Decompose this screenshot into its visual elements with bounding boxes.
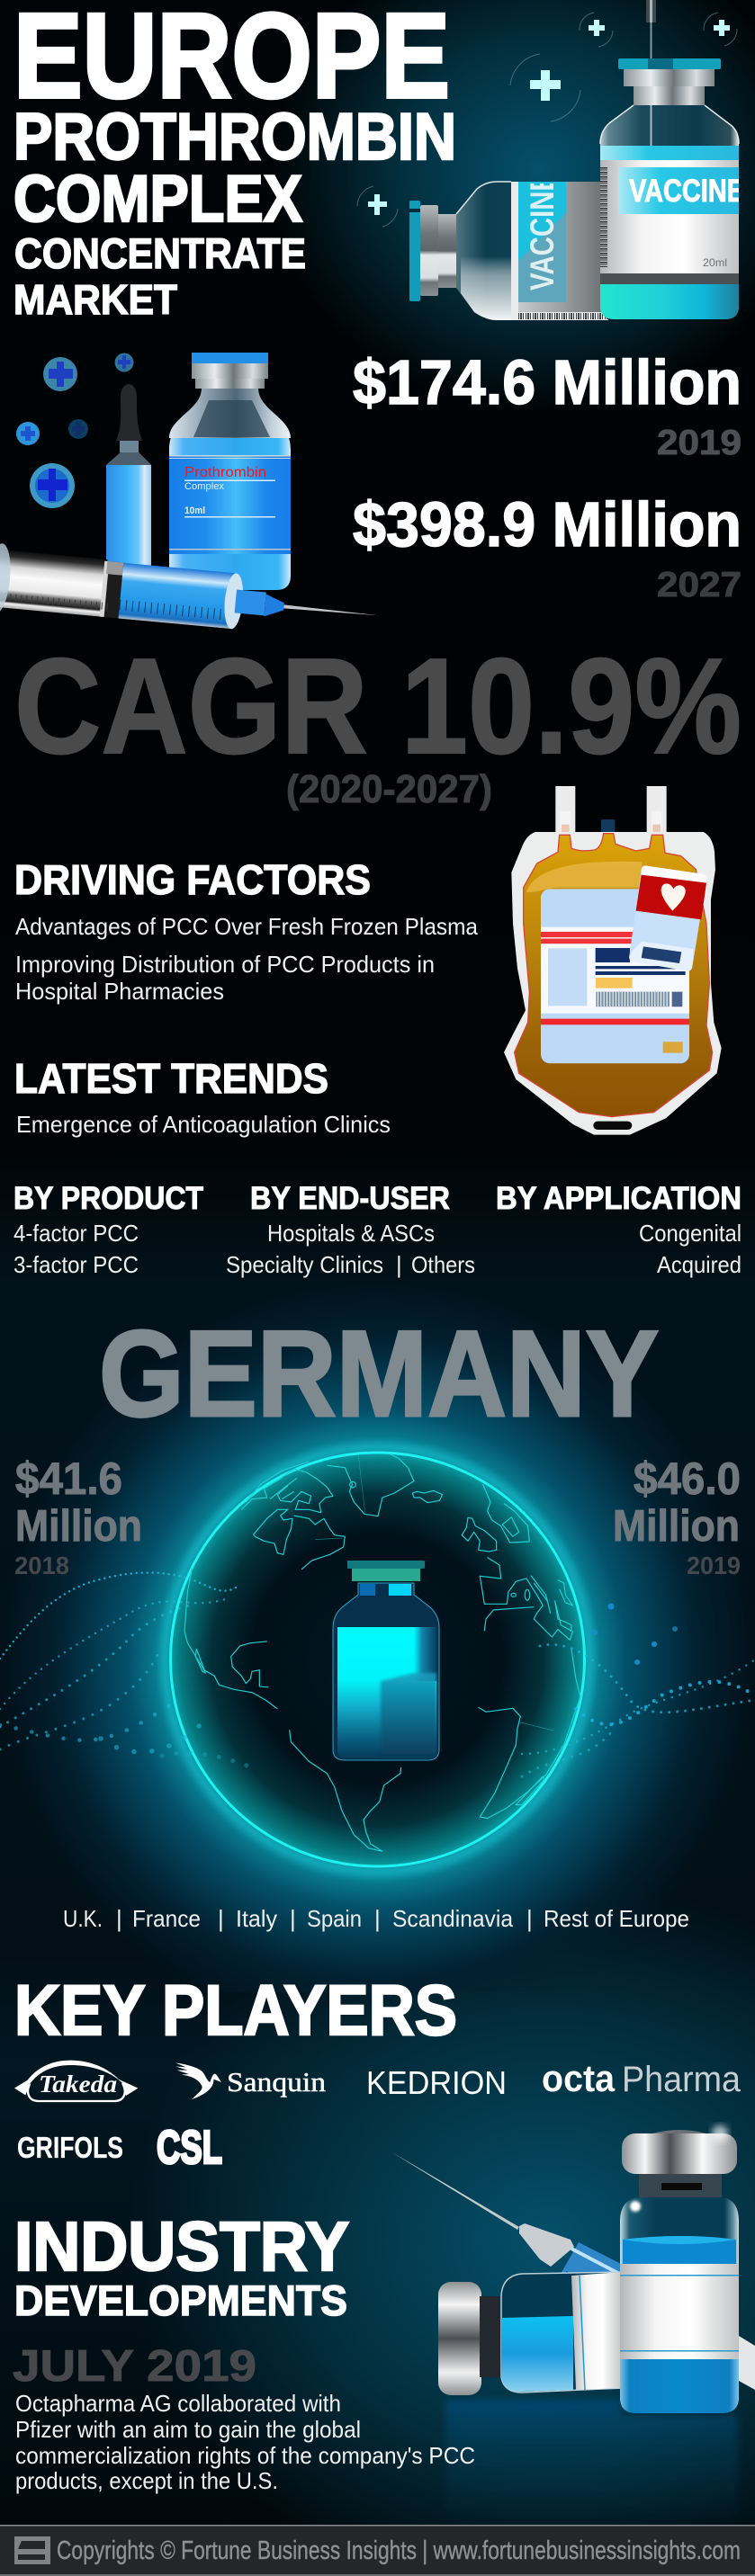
country list: Spain	[307, 1905, 362, 1932]
country list: |	[218, 1905, 224, 1932]
stat: Germany 2019: 2019	[687, 1552, 741, 1579]
country list	[63, 1905, 689, 1932]
heading: Germany: GERMANY	[99, 1305, 659, 1442]
panel: by application	[496, 1181, 742, 1278]
upright vial	[620, 2125, 739, 2413]
reflection	[445, 2400, 738, 2523]
panel: by application: Congenital	[639, 1220, 742, 1247]
lying vial	[409, 174, 608, 320]
stat: market size 2019: 2019	[657, 424, 742, 462]
title: PROTHROMBIN	[13, 101, 456, 174]
country list: Italy	[236, 1905, 277, 1932]
title	[13, 0, 456, 323]
stat: market size 2019	[353, 347, 742, 462]
panel: by application: Acquired	[657, 1251, 742, 1278]
panel: by product: 3-factor PCC	[13, 1251, 139, 1278]
logo: Octapharma	[542, 2057, 742, 2099]
continents	[184, 1454, 580, 1851]
panel: by product: BY PRODUCT	[13, 1181, 203, 1216]
panel: industry developments: commercialization rights of the company's PCC	[15, 2442, 475, 2469]
logo: Sanquin	[175, 2062, 327, 2099]
country list: |	[374, 1905, 381, 1932]
stat: Germany 2019	[613, 1453, 741, 1579]
panel: latest trends: LATEST TRENDS	[14, 1055, 328, 1102]
country list: France	[132, 1905, 201, 1932]
bag hole	[593, 1122, 632, 1130]
illustration: vaccine vials	[357, 0, 744, 320]
panel: by end-user: |	[396, 1251, 402, 1278]
upright vial: 20ml	[703, 256, 727, 269]
icon: glowing vial	[333, 1561, 439, 1760]
logo: Kedrion: KEDRION	[366, 2064, 507, 2101]
bag body	[504, 832, 722, 1135]
prothrombin vial: Complex	[184, 481, 225, 492]
panel: industry developments: Pfizer with an aim to gain the global	[15, 2416, 361, 2443]
bag highlight	[526, 862, 642, 892]
country list: U.K.	[63, 1905, 103, 1932]
upright vial	[600, 58, 744, 319]
stat: Germany 2019: $46.0	[634, 1453, 741, 1504]
panel: latest trends: Emergence of Anticoagulation Clinics	[16, 1111, 391, 1138]
stat: market size 2019: $174.6 Million	[353, 347, 742, 417]
logo: Takeda	[14, 2061, 138, 2101]
icon: blue plus circles	[16, 353, 133, 508]
logo: Octapharma: octa	[542, 2057, 616, 2099]
syringe	[391, 2151, 755, 2390]
lying vial	[438, 2272, 623, 2395]
bag liquid	[515, 834, 713, 1117]
panel: driving factors: Hospital Pharmacies	[15, 978, 224, 1005]
panel: by product	[13, 1181, 203, 1278]
country list: Scandinavia	[392, 1905, 514, 1932]
CAGR: (2020-2027)	[286, 767, 492, 811]
panel: by end-user: Others	[411, 1251, 475, 1278]
panel: industry developments: DEVELOPMENTS	[14, 2276, 347, 2324]
panel: by end-user: Specialty Clinics	[226, 1251, 383, 1278]
title: CONCENTRATE	[14, 229, 306, 277]
ampoule	[106, 384, 151, 566]
panel: by application: BY APPLICATION	[496, 1181, 742, 1216]
prothrombin vial: 10ml	[184, 505, 205, 516]
panel: industry developments: INDUSTRY	[14, 2208, 349, 2285]
lying vial: VACCINE	[524, 174, 561, 291]
stat: market size 2027: 2027	[657, 566, 742, 604]
prothrombin vial: Prothrombin	[184, 465, 266, 480]
logo: Octapharma: Pharma	[622, 2060, 742, 2099]
needle	[646, 0, 656, 144]
bag label	[541, 889, 689, 1063]
panel: driving factors	[14, 856, 478, 1005]
illustration: prothrombin vial and syringe	[0, 353, 382, 648]
stat: Germany 2018: Million	[15, 1502, 142, 1551]
footer logo	[14, 2536, 50, 2564]
logo: Sanquin: Sanquin	[227, 2066, 327, 2097]
heading: key players: KEY PLAYERS	[14, 1970, 457, 2050]
globe ring	[166, 1448, 589, 1871]
country list: |	[290, 1905, 296, 1932]
stat: Germany 2019: Million	[613, 1502, 740, 1551]
illustration: plasma bag	[504, 786, 722, 1135]
panel: by end-user	[226, 1181, 475, 1278]
country list: Rest of Europe	[544, 1905, 689, 1932]
stat: Germany 2018: 2018	[14, 1552, 69, 1579]
bag tubes	[555, 786, 667, 836]
panel: industry developments	[13, 2208, 475, 2494]
illustration: vials and syringe	[391, 2125, 755, 2523]
stat: Germany 2018	[14, 1453, 142, 1579]
country list: |	[116, 1905, 122, 1932]
panel: driving factors: Advantages of PCC Over Fresh Frozen Plasma	[15, 913, 478, 940]
panel: driving factors: Improving Distribution of PCC Products in	[15, 951, 435, 978]
logo: Takeda: Takeda	[39, 2071, 117, 2097]
logo: CSL: CSL	[157, 2122, 222, 2174]
stat: Germany 2018: $41.6	[15, 1453, 122, 1504]
panel: industry developments: JULY 2019	[13, 2342, 256, 2391]
panel: driving factors: DRIVING FACTORS	[14, 856, 371, 903]
title: COMPLEX	[13, 163, 302, 236]
icon: plus bubbles	[357, 13, 737, 227]
panel: by end-user: BY END-USER	[250, 1181, 450, 1216]
prothrombin vial	[169, 353, 291, 590]
footer	[0, 2525, 755, 2576]
bag tag	[629, 866, 706, 971]
particle streams	[0, 1572, 755, 1776]
syringe	[0, 542, 382, 648]
panel: industry developments: Octapharma AG collaborated with	[15, 2390, 341, 2417]
stat: market size 2027	[353, 489, 742, 604]
panel: by end-user: Hospitals & ASCs	[267, 1220, 435, 1247]
stat: market size 2027: $398.9 Million	[353, 489, 742, 559]
panel: latest trends	[14, 1055, 391, 1138]
panel: by product: 4-factor PCC	[13, 1220, 139, 1247]
logo: Grifols: GRIFOLS	[17, 2131, 123, 2164]
country list: |	[526, 1905, 533, 1932]
globe	[0, 1448, 755, 1871]
title: MARKET	[13, 276, 177, 323]
panel: industry developments: products, except in the U.S.	[15, 2467, 278, 2494]
